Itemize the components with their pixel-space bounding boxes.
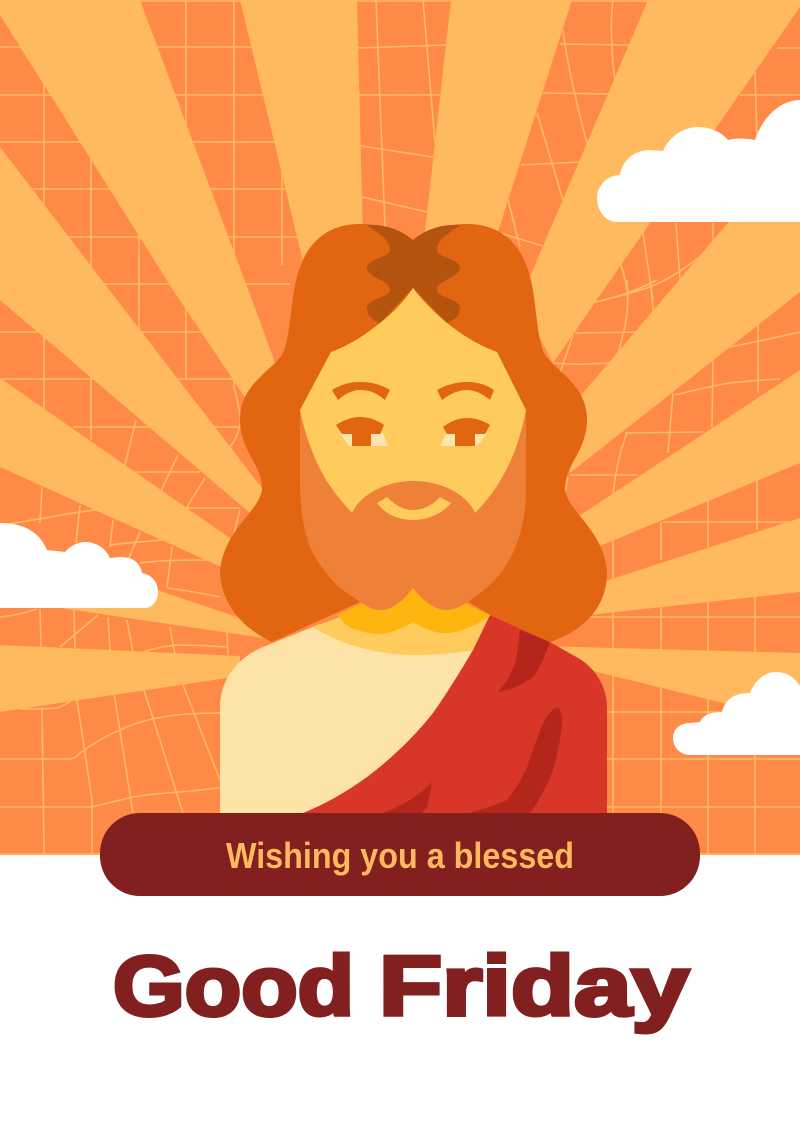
title: Friday xyxy=(379,939,689,1033)
hair parting xyxy=(367,225,460,323)
right eyebrow xyxy=(437,382,494,400)
beard xyxy=(300,410,526,610)
cloud: top right xyxy=(597,100,800,222)
neck xyxy=(313,590,490,655)
smile xyxy=(377,497,451,520)
sash fold: lower xyxy=(383,782,432,813)
banner pill xyxy=(100,813,700,896)
orange sky background xyxy=(0,0,800,855)
banner text: Wishing you a blessed xyxy=(226,835,574,876)
golden collar xyxy=(337,580,490,634)
sun rays xyxy=(0,0,800,722)
sash fold: shoulder xyxy=(498,630,550,692)
left eye xyxy=(336,417,388,446)
street map grid pattern xyxy=(0,0,800,855)
left eyebrow xyxy=(332,382,390,400)
cloud: left xyxy=(0,523,158,608)
red sash xyxy=(303,615,607,813)
white robe xyxy=(220,624,490,813)
cloud: lower right xyxy=(673,672,800,755)
figure of Jesus xyxy=(220,224,607,813)
long hair xyxy=(220,224,607,642)
right eye xyxy=(440,418,490,446)
title: Good xyxy=(113,939,354,1033)
face xyxy=(300,288,526,540)
sash fold: right xyxy=(470,707,562,813)
